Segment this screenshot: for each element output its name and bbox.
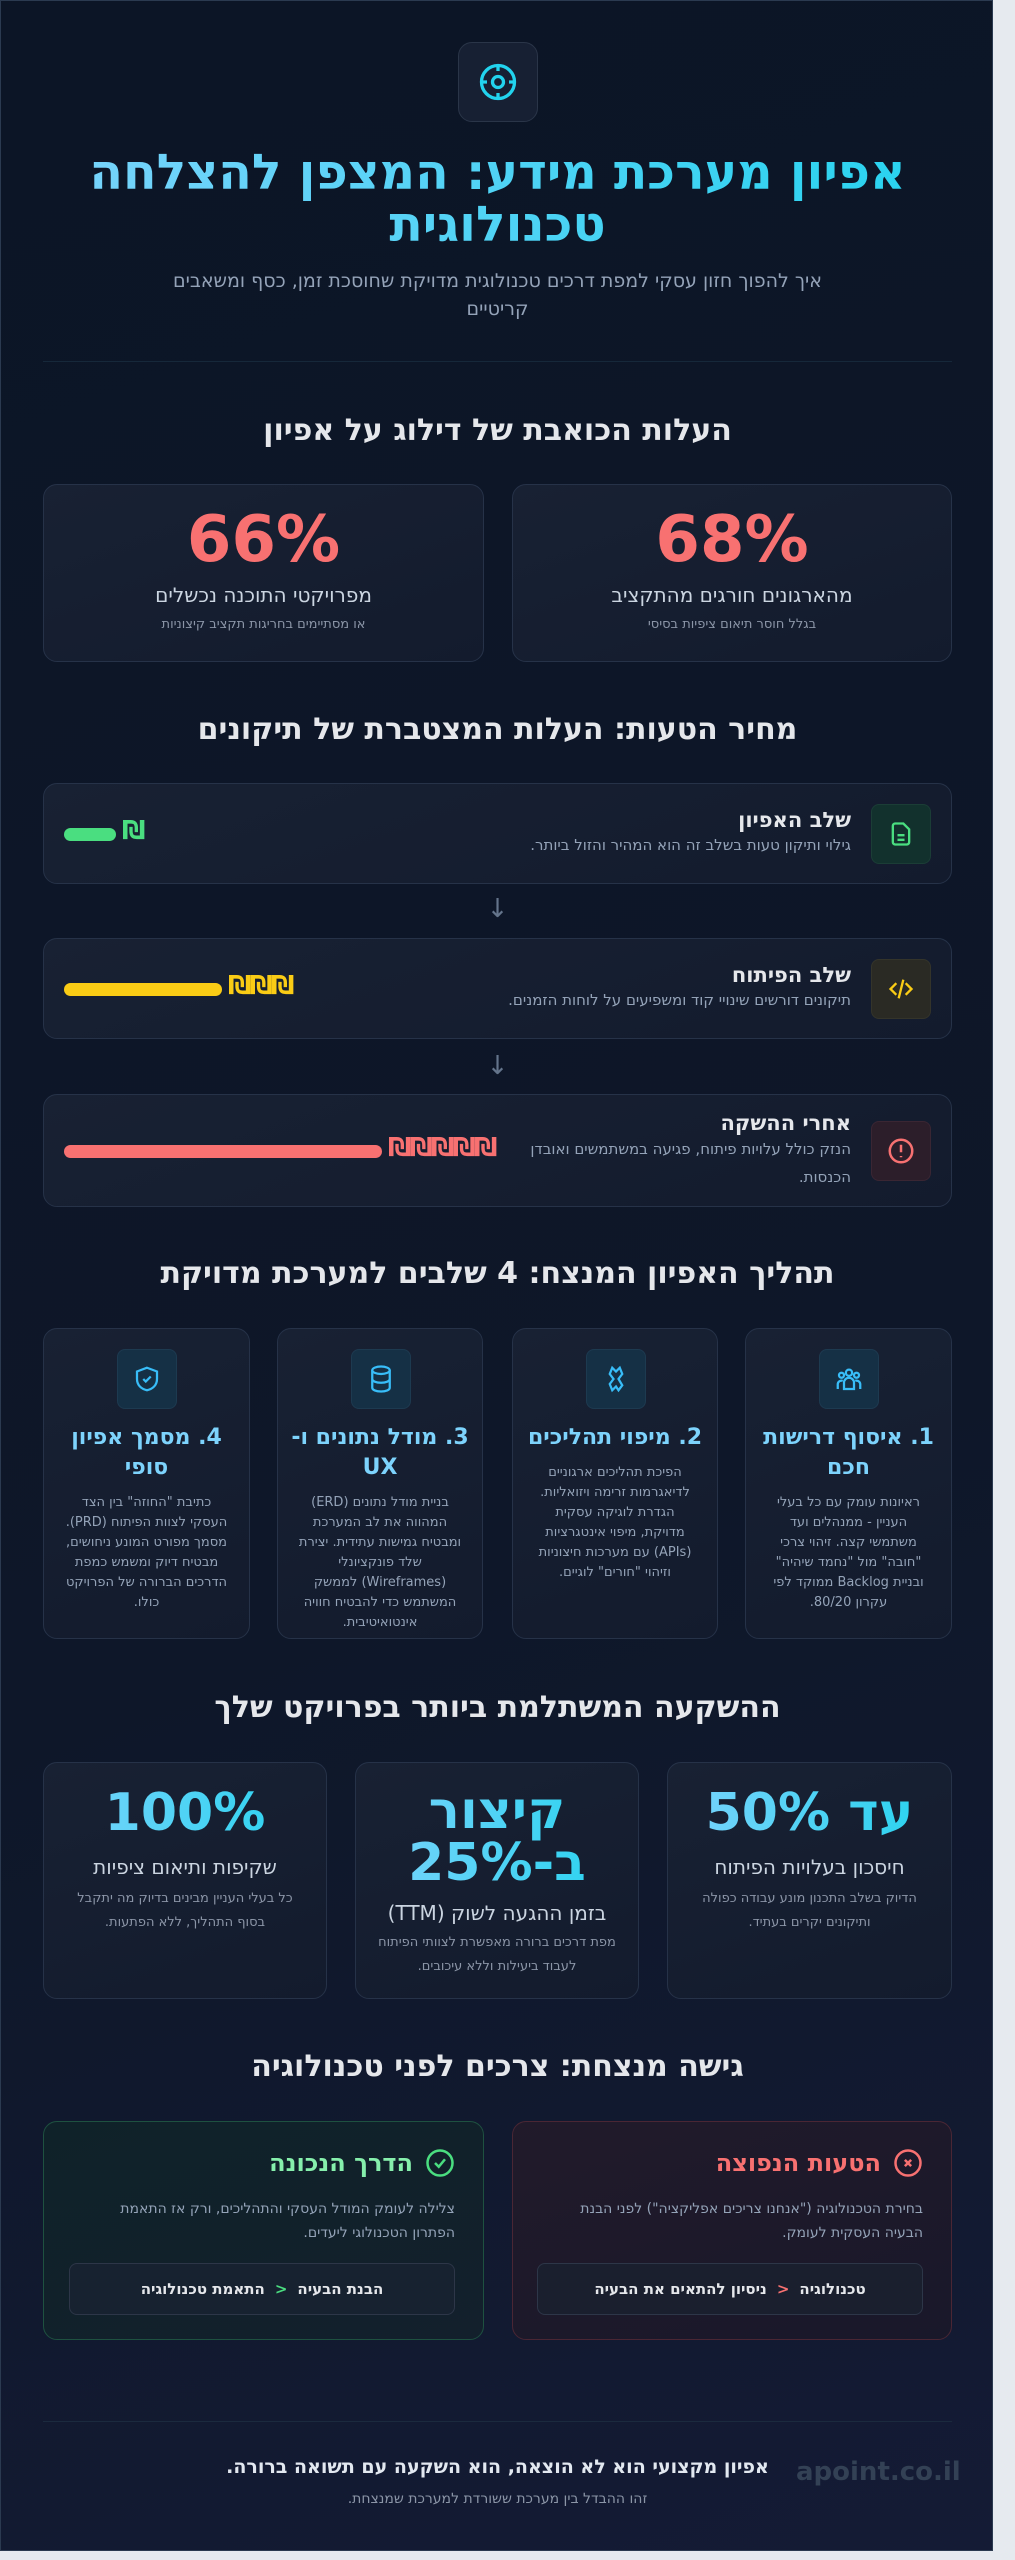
cost card: development: ₪₪₪ xyxy=(228,971,293,1001)
roi card: 50%: חיסכון בעלויות הפיתוח xyxy=(714,1855,905,1879)
title: אפיון מערכת מידע: המצפן להצלחה טכנולוגית xyxy=(89,144,906,253)
cost card: development: תיקונים דורשים שינויי קוד ומשפיעים על לוחות הזמנים. xyxy=(508,991,851,1009)
roi card: 100%: כל בעלי העניין מבינים בדיוק מה יתקבל בסוף התהליך, ללא הפתעות. xyxy=(77,1891,293,1930)
watermark: apoint.co.il xyxy=(796,2457,961,2487)
compare card: wrong: < xyxy=(777,2280,789,2298)
process card 2: הפיכת תהליכים ארגוניים לדיאגרמות זרימה ויזואליות. הגדרת לוגיקה עסקית מדויקת, מיפוי אינטגרציות (APIs) עם מערכות חיצוניות וזיהוי "חורים" לוגיים. xyxy=(539,1465,691,1580)
cost card: planning: ₪ xyxy=(122,816,144,846)
cost card: planning: גילוי ותיקון טעות בשלב זה הוא המהיר והזול ביותר. xyxy=(530,836,851,854)
roi card: 25% xyxy=(355,1762,639,1999)
stat card: 66%: מפרויקטי התוכנה נכשלים xyxy=(155,583,372,607)
footer sub: זהו ההבדל בין מערכת ששורדת למערכת שמנצחת. xyxy=(348,2491,647,2507)
cost card: after launch: אחרי ההשקה xyxy=(720,1111,851,1135)
stat card: 68%: מהארגונים חורגים מהתקציב xyxy=(611,583,853,607)
cost card: after launch: הנזק כולל עלויות פיתוח, פגיעה במשתמשים ואובדן הכנסות. xyxy=(530,1140,851,1186)
roi card: 50%: עד 50% xyxy=(706,1783,913,1843)
stat card: 68%: בגלל חוסר תיאום ציפיות בסיסי xyxy=(648,617,816,632)
roi card: 100% xyxy=(43,1762,327,1999)
cost card: development xyxy=(43,938,952,1039)
roi card: 50% xyxy=(667,1762,952,1999)
stat card: 68%: 68% xyxy=(655,503,809,577)
process card 4: כתיבת "החוזה" בין הצד העסקי לצוות הפיתוח (PRD). מסמך מפורט המונע ניחושים, מבטיח דיוק ומשמש כמפת הדרכים הברורה של הפרויקט כולו. xyxy=(66,1495,227,1610)
compare card: wrong: טכנולוגיה ניסיון להתאים את הבעיה xyxy=(594,2280,866,2298)
compare card: right xyxy=(43,2121,484,2340)
process card 3: בניית מודל נתונים (ERD) המהווה את לב המערכת ומבטיח גמישות עתידית. יצירת שלד פונקציונלי (Wireframes) לממשק המשתמש כדי להבטיח חוויה אינטואיטיבית. xyxy=(299,1495,461,1630)
compare card: wrong: בחירת הטכנולוגיה ("אנחנו צריכים אפליקציה") לפני הבנת הבעיה העסקית לעומק. xyxy=(580,2201,923,2241)
compare card: right: < xyxy=(275,2280,287,2298)
cost card: planning xyxy=(43,783,952,884)
heading: cost of errors: מחיר הטעות: העלות המצטברת של תיקונים xyxy=(198,712,797,747)
cost card: planning: שלב האפיון xyxy=(738,808,851,832)
roi card: 25%: קיצור ב-25% xyxy=(408,1781,586,1893)
compare card: wrong: הטעות הנפוצה xyxy=(716,2149,881,2177)
process card 3: 3. מודל נתונים ו- UX xyxy=(291,1425,469,1480)
arrow: ↓ xyxy=(487,1051,508,1081)
process card 1: ראיונות עומק עם כל בעלי העניין - ממנהלים ועד משתמשי קצה. זיהוי צרכי "חובה" מול "נחמד שיהיה" ובניית Backlog ממוקד לפי עקרון 80/20. xyxy=(773,1495,924,1610)
roi card: 25%: מפת דרכים ברורה מאפשרת לצוותי הפיתוח לעבוד ביעילות וללא עיכובים. xyxy=(378,1935,616,1974)
heading: ROI: ההשקעה המשתלמת ביותר בפרויקט שלך xyxy=(214,1690,781,1725)
roi card: 100%: 100% xyxy=(105,1783,265,1843)
process card 2 xyxy=(512,1328,718,1639)
heading: winning approach: גישה מנצחת: צרכים לפני טכנולוגיה xyxy=(251,2049,744,2084)
process card 3 xyxy=(277,1328,483,1639)
stat card: 66%: 66% xyxy=(187,503,340,577)
stat card: 66%: או מסתיימים בחריגות תקציב קיצוניות xyxy=(162,617,365,632)
cost card: after launch xyxy=(43,1094,952,1207)
roi card: 100%: שקיפות ותיאום ציפיות xyxy=(93,1855,277,1879)
heading: process: תהליך האפיון המנצח: 4 שלבים למערכת מדויקת xyxy=(160,1256,835,1291)
compare card: right: הבנת הבעיה התאמת טכנולוגיה xyxy=(141,2280,383,2298)
icon: header chip xyxy=(458,42,538,122)
arrow: ↓ xyxy=(487,894,508,924)
subtitle: איך להפוך חזון עסקי למפת דרכים טכנולוגית מדויקת שחוסכת זמן, כסף ומשאבים קריטיים xyxy=(173,270,822,320)
process card 4 xyxy=(43,1328,250,1639)
compare card: right: צלילה לעומק המודל העסקי והתהליכים, ורק אז התאמת הפתרון הטכנולוגי ליעדים. xyxy=(120,2201,455,2241)
roi card: 25%: בזמן ההגעה לשוק (TTM) xyxy=(388,1901,606,1925)
cost card: after launch: ₪₪₪₪₪ xyxy=(388,1133,496,1163)
roi card: 50%: הדיוק בשלב התכנון מונע עבודה כפולה ותיקונים יקרים בעתיד. xyxy=(702,1891,917,1930)
stat card: 66% xyxy=(43,484,484,662)
stat card: 68% xyxy=(512,484,952,662)
cost card: development: שלב הפיתוח xyxy=(732,963,851,987)
compare card: right: הדרך הנכונה xyxy=(269,2149,413,2177)
compare card: wrong xyxy=(512,2121,952,2340)
heading: cost of skipping: העלות הכואבת של דילוג על אפיון xyxy=(263,413,732,448)
process card 2: 2. מיפוי תהליכים xyxy=(528,1425,702,1450)
process card 4: 4. מסמך אפיון סופי xyxy=(71,1425,222,1480)
footer statement: אפיון מקצועי הוא לא הוצאה, הוא השקעה עם תשואה ברורה. xyxy=(226,2456,769,2478)
process card 1: 1. איסוף דרישות חכם xyxy=(763,1425,934,1480)
process card 1 xyxy=(745,1328,952,1639)
